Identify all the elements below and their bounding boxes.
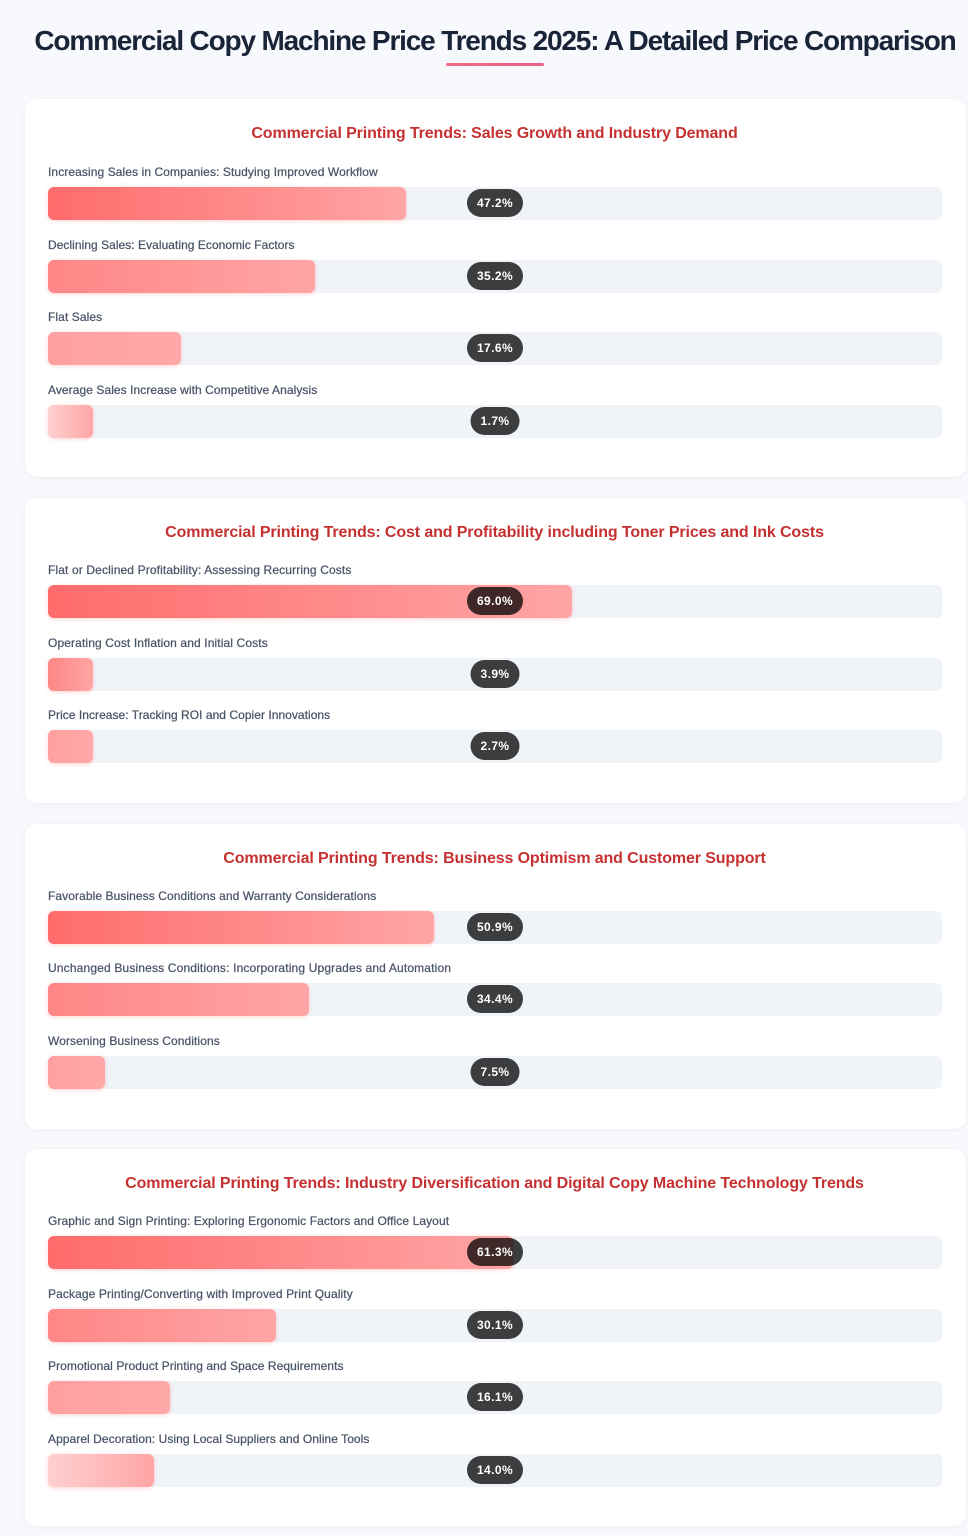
bar: package printing 30.1%: 30.1% xyxy=(477,1318,513,1332)
bar: declining sales 35.2%: Declining Sales: Evaluating Economic Factors xyxy=(48,238,295,252)
title: Commercial Copy Machine Price Trends 2025: A Detailed Price Comparison xyxy=(34,25,956,56)
bar: worsening business conditions 7.5% xyxy=(46,1034,942,1092)
panel heading: Commercial Printing Trends: Sales Growth and Industry Demand xyxy=(251,125,738,142)
bar: graphic and sign printing 61.3%: 61.3% xyxy=(477,1245,513,1259)
bar: flat sales 17.6% xyxy=(46,310,942,368)
bar: worsening business conditions 7.5%: Worsening Business Conditions xyxy=(48,1034,220,1048)
bar: package printing 30.1% xyxy=(46,1287,942,1345)
bar: apparel decoration 14.0%: 14.0% xyxy=(477,1463,513,1477)
panel heading: Commercial Printing Trends: Industry Diversification and Digital Copy Machine Technology Trends xyxy=(125,1175,864,1192)
bar: price increase 2.7% xyxy=(46,708,942,766)
panel heading: Commercial Printing Trends: Cost and Profitability including Toner Prices and Ink Costs xyxy=(165,524,824,541)
title underline xyxy=(446,63,544,66)
panel: cost and profitability xyxy=(25,498,966,803)
bar: promotional product printing 16.1%: Promotional Product Printing and Space Requirements xyxy=(48,1359,344,1373)
bar: graphic and sign printing 61.3%: Graphic and Sign Printing: Exploring Ergonomic Factors and Office Layout xyxy=(48,1214,449,1228)
bar: flat sales 17.6%: Flat Sales xyxy=(48,310,102,324)
panel: industry diversification and technology trends xyxy=(25,1149,966,1526)
bar: price increase 2.7%: Price Increase: Tracking ROI and Copier Innovations xyxy=(48,708,330,722)
bar: promotional product printing 16.1%: 16.1% xyxy=(477,1390,513,1404)
bar: average sales increase 1.7%: 1.7% xyxy=(481,414,509,428)
bar: package printing 30.1%: Package Printing/Converting with Improved Print Quality xyxy=(48,1287,353,1301)
bar: increasing sales 47.2% xyxy=(46,165,942,223)
panel: sales growth and industry demand xyxy=(25,99,966,477)
bar: unchanged business conditions 34.4%: 34.4% xyxy=(477,992,513,1006)
bar: operating cost inflation 3.9%: Operating Cost Inflation and Initial Costs xyxy=(48,636,268,650)
bar: unchanged business conditions 34.4%: Unchanged Business Conditions: Incorporating Upgrades and Automation xyxy=(48,961,451,975)
bar: worsening business conditions 7.5%: 7.5% xyxy=(481,1065,509,1079)
bar: promotional product printing 16.1% xyxy=(46,1359,942,1417)
bar: favorable business conditions 50.9%: Favorable Business Conditions and Warranty Considerations xyxy=(48,889,376,903)
bar: operating cost inflation 3.9% xyxy=(46,636,942,694)
bar: declining sales 35.2%: 35.2% xyxy=(477,269,513,283)
bar: flat or declined profitability 69.0% xyxy=(46,563,942,621)
bar: operating cost inflation 3.9%: 3.9% xyxy=(481,667,509,681)
bar: flat or declined profitability 69.0%: Flat or Declined Profitability: Assessing Recurring Costs xyxy=(48,563,352,577)
bar: flat or declined profitability 69.0%: 69.0% xyxy=(477,594,513,608)
panel heading: Commercial Printing Trends: Business Optimism and Customer Support xyxy=(223,850,766,867)
bar: average sales increase 1.7%: Average Sales Increase with Competitive Analysis xyxy=(48,383,317,397)
bar: unchanged business conditions 34.4% xyxy=(46,961,942,1019)
bar: graphic and sign printing 61.3% xyxy=(46,1214,942,1272)
bar: increasing sales 47.2%: 47.2% xyxy=(477,196,513,210)
bar: price increase 2.7%: 2.7% xyxy=(481,739,509,753)
panel: business optimism and customer support xyxy=(25,824,966,1129)
bar: average sales increase 1.7% xyxy=(46,383,942,441)
bar: increasing sales 47.2%: Increasing Sales in Companies: Studying Improved Workflow xyxy=(48,165,378,179)
bar: declining sales 35.2% xyxy=(46,238,942,296)
bar: favorable business conditions 50.9%: 50.9% xyxy=(477,920,513,934)
bar: apparel decoration 14.0% xyxy=(46,1432,942,1490)
bar: apparel decoration 14.0%: Apparel Decoration: Using Local Suppliers and Online Tools xyxy=(48,1432,369,1446)
bar: flat sales 17.6%: 17.6% xyxy=(477,341,513,355)
bar: favorable business conditions 50.9% xyxy=(46,889,942,947)
